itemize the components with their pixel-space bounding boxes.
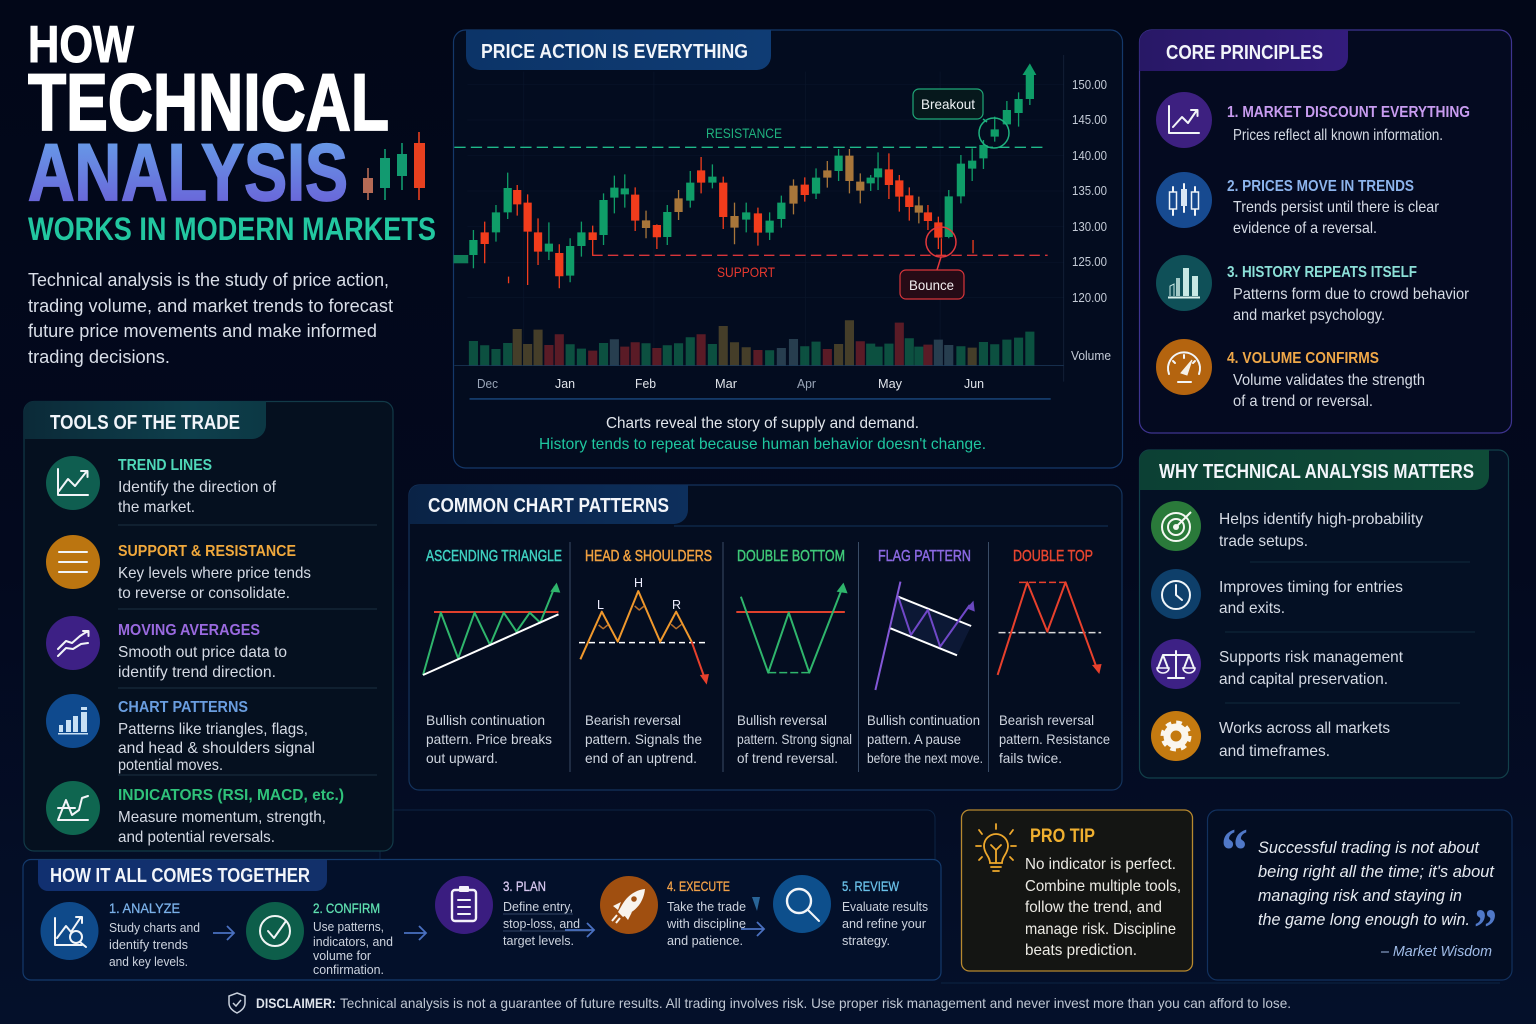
month axis labels: May <box>878 377 903 391</box>
price axis labels: 135.00 <box>1072 184 1107 198</box>
panel: core principles <box>1140 30 1512 433</box>
quote text: being right all the time; it's about <box>1258 862 1495 881</box>
heading tab: price action <box>466 30 771 70</box>
pattern: double top: pattern. Resistance <box>999 731 1110 747</box>
step 2: confirm <box>246 900 393 977</box>
pattern: ascending triangle: ASCENDING TRIANGLE <box>426 548 562 565</box>
step 4: execute: and patience. <box>667 934 743 948</box>
tool: trend lines: the market. <box>118 499 195 516</box>
month axis labels: Apr <box>797 377 816 391</box>
reason: timing: and exits. <box>1219 600 1285 617</box>
arrow 2 <box>404 926 426 940</box>
step 2: confirm: 2. CONFIRM <box>313 900 380 916</box>
tool: chart patterns: and head & shoulders signal <box>118 740 315 757</box>
month axis labels: Jan <box>555 377 575 391</box>
pattern: head and shoulders: end of an uptrend. <box>585 750 697 766</box>
candlestick chart <box>453 55 1064 399</box>
step 3: plan: target levels. <box>503 934 574 948</box>
panel: tools of the trade <box>24 401 393 851</box>
opening quote mark: “ <box>1221 817 1248 885</box>
pattern: head and shoulders: R <box>672 598 681 612</box>
quote text <box>1258 838 1495 929</box>
pattern: double bottom <box>736 548 852 766</box>
reason: risk: and capital preservation. <box>1219 671 1388 688</box>
tool: trend lines: TREND LINES <box>118 457 212 474</box>
panel: price action chart <box>453 30 1122 468</box>
label: support: SUPPORT <box>717 264 775 280</box>
reason: markets: Works across all markets <box>1219 720 1390 737</box>
pattern: ascending triangle: out upward. <box>426 750 498 766</box>
pattern: double bottom: DOUBLE BOTTOM <box>737 548 845 565</box>
label: resistance: RESISTANCE <box>706 125 782 141</box>
pattern: double bottom: of trend reversal. <box>737 750 838 766</box>
closing quote mark: ” <box>1474 898 1497 958</box>
step 5: review: Evaluate results <box>842 900 928 914</box>
quote text: Successful trading is not about <box>1258 838 1480 857</box>
intro paragraph: trading decisions. <box>28 347 170 367</box>
pattern: double top: Bearish reversal <box>999 712 1094 728</box>
quote text: managing risk and staying in <box>1258 886 1462 905</box>
month axis labels: Jun <box>964 377 984 391</box>
step 2: confirm: indicators, and <box>313 935 393 949</box>
intro paragraph: Technical analysis is the study of price action, <box>28 270 389 290</box>
tip text: manage risk. Discipline <box>1025 921 1176 938</box>
heading tab: tools <box>24 401 266 439</box>
step 2: confirm: volume for <box>313 949 371 963</box>
principle 4: Volume validates the strength <box>1233 372 1425 389</box>
tool: chart patterns: Patterns like triangles, flags, <box>118 721 308 738</box>
step 3: plan: Define entry, <box>503 900 573 914</box>
price axis labels: 120.00 <box>1072 291 1107 305</box>
principle 3: and market psychology. <box>1233 307 1385 324</box>
principle 4 <box>1156 339 1425 410</box>
reason: setups: Helps identify high-probability <box>1219 511 1423 528</box>
price axis labels: 145.00 <box>1072 113 1107 127</box>
disclaimer: DISCLAIMER: <box>256 995 336 1011</box>
volume bars <box>473 320 1030 366</box>
month axis labels <box>477 377 984 391</box>
intro paragraph <box>28 270 393 367</box>
step 1: analyze: identify trends <box>109 938 188 952</box>
price axis labels <box>1071 78 1111 363</box>
tip text: Combine multiple tools, <box>1025 878 1181 895</box>
heading tab: patterns <box>409 485 688 524</box>
pattern: double top: DOUBLE TOP <box>1013 548 1093 565</box>
step 2: confirm: Use patterns, <box>313 920 384 934</box>
step 5: review: 5. REVIEW <box>842 878 900 894</box>
tip text: follow the trend, and <box>1025 899 1162 916</box>
principle 3 <box>1156 255 1470 324</box>
pattern: head and shoulders: H <box>634 576 643 590</box>
arrow 4 <box>741 922 764 936</box>
tool: indicators: and potential reversals. <box>118 829 275 846</box>
pattern: ascending triangle: Bullish continuation <box>426 712 545 728</box>
heading tab: core principles <box>1140 30 1348 71</box>
heading tab: patterns: COMMON CHART PATTERNS <box>428 495 669 517</box>
principle 4: 4. VOLUME CONFIRMS <box>1227 350 1379 367</box>
step 4: execute: 4. EXECUTE <box>667 878 730 894</box>
panel: quote <box>1208 810 1512 980</box>
tool: support and resistance: SUPPORT & RESISTANCE <box>118 543 296 560</box>
price axis labels: Volume <box>1071 349 1111 363</box>
attribution: – Market Wisdom <box>1380 943 1492 960</box>
price axis labels: 140.00 <box>1072 149 1107 163</box>
step 1: analyze: 1. ANALYZE <box>109 900 180 916</box>
step 3: plan <box>435 876 580 948</box>
title block <box>28 16 436 247</box>
heading tab: why matters: WHY TECHNICAL ANALYSIS MATTERS <box>1159 461 1474 483</box>
tool: indicators <box>46 781 344 846</box>
tool: support and resistance <box>46 535 311 602</box>
reason: markets: and timeframes. <box>1219 743 1330 760</box>
step 3: plan: stop-loss, and <box>503 917 580 931</box>
principle 1 <box>1156 92 1470 148</box>
pattern: flag: pattern. A pause <box>867 731 961 747</box>
icon: shield <box>229 993 245 1013</box>
tool: moving averages: Smooth out price data to <box>118 644 287 661</box>
heading tab: why matters <box>1140 450 1489 490</box>
price axis labels: 125.00 <box>1072 255 1107 269</box>
step 2: confirm: confirmation. <box>313 963 384 977</box>
heading tab: how it comes together <box>38 860 327 891</box>
tool: moving averages <box>46 616 287 681</box>
step 1: analyze: and key levels. <box>109 955 188 969</box>
step 5: review <box>773 875 928 948</box>
subtitle: WORKS IN MODERN MARKETS <box>28 211 436 247</box>
tool: indicators: Measure momentum, strength, <box>118 809 326 826</box>
reason: setups <box>1151 501 1423 551</box>
pattern: double bottom: pattern. Strong signal <box>737 731 852 747</box>
pattern: ascending triangle: pattern. Price breaks <box>426 731 552 747</box>
pattern: head and shoulders: HEAD & SHOULDERS <box>585 548 712 565</box>
step 5: review: strategy. <box>842 934 890 948</box>
pattern: head and shoulders <box>579 548 712 766</box>
reason: risk: Supports risk management <box>1219 649 1404 666</box>
arrow 1 <box>213 926 234 940</box>
tool: chart patterns: CHART PATTERNS <box>118 699 248 716</box>
principle 3: Patterns form due to crowd behavior <box>1233 286 1470 303</box>
reason: timing <box>1151 569 1403 619</box>
pattern: double top: fails twice. <box>999 750 1062 766</box>
heading tab: how it comes together: HOW IT ALL COMES TOGETHER <box>50 865 310 887</box>
step 1: analyze: Study charts and <box>109 921 200 935</box>
principle 4: of a trend or reversal. <box>1233 393 1373 410</box>
chart caption: Charts reveal the story of supply and demand. <box>606 415 919 432</box>
callout: breakout <box>913 89 1009 148</box>
tan candles <box>646 149 919 244</box>
principle 1: 1. MARKET DISCOUNT EVERYTHING <box>1227 104 1470 121</box>
support line <box>592 253 1048 257</box>
green candles <box>473 63 1036 282</box>
reason: timing: Improves timing for entries <box>1219 579 1403 596</box>
title: ANALYSIS: ANALYSIS <box>28 128 348 218</box>
heading tab: core principles: CORE PRINCIPLES <box>1166 42 1323 64</box>
tool: trend lines <box>46 456 277 516</box>
price axis labels: 150.00 <box>1072 78 1107 92</box>
chart caption: History tends to repeat because human behavior doesn't change. <box>539 436 986 453</box>
pattern: flag: before the next move. <box>867 750 983 766</box>
month axis labels: Feb <box>635 377 656 391</box>
title: TECHNICAL: TECHNICAL <box>28 58 389 148</box>
principle 2: evidence of a reversal. <box>1233 220 1377 237</box>
principle 2: Trends persist until there is clear <box>1233 199 1440 216</box>
tool: moving averages: MOVING AVERAGES <box>118 622 260 639</box>
callout: bounce <box>900 227 964 299</box>
title: HOW: HOW <box>28 16 135 74</box>
quote text: the game long enough to win. <box>1258 910 1470 929</box>
reason: markets <box>1151 711 1390 761</box>
tool: moving averages: identify trend direction. <box>118 664 276 681</box>
principle 2: 2. PRICES MOVE IN TRENDS <box>1227 178 1414 195</box>
tool: support and resistance: to reverse or consolidate. <box>118 585 290 602</box>
tool: chart patterns: potential moves. <box>118 757 223 774</box>
pattern: double top <box>998 548 1110 766</box>
step 3: plan: 3. PLAN <box>503 878 546 894</box>
disclaimer: Technical analysis is not a guarantee of future results. All trading involves risk. Use proper risk management and never invest more than you can afford to lose. <box>340 995 1291 1011</box>
icon: light bulb <box>976 824 1016 871</box>
month axis labels: Mar <box>715 377 737 391</box>
reason: setups: trade setups. <box>1219 533 1308 550</box>
heading tab: tools: TOOLS OF THE TRADE <box>50 412 240 434</box>
month axis labels: Dec <box>477 377 498 391</box>
step 1: analyze <box>40 900 200 969</box>
pattern: double bottom: Bullish reversal <box>737 712 827 728</box>
step 5: review: and refine your <box>842 917 926 931</box>
principle 3: 3. HISTORY REPEATS ITSELF <box>1227 264 1417 281</box>
panel: why technical analysis matters <box>1140 450 1508 778</box>
pattern: flag <box>867 548 983 766</box>
tip text: beats prediction. <box>1025 942 1137 959</box>
tool: chart patterns <box>46 694 315 774</box>
panel: common chart patterns <box>409 485 1122 790</box>
tool: support and resistance: Key levels where price tends <box>118 565 311 582</box>
red candles <box>485 153 973 288</box>
intro paragraph: trading volume, and market trends to forecast <box>28 296 393 316</box>
tip text <box>1025 856 1181 959</box>
pattern: head and shoulders: Bearish reversal <box>585 712 681 728</box>
panel: how it all comes together <box>23 860 941 980</box>
principle 1: Prices reflect all known information. <box>1233 127 1443 144</box>
tool: indicators: INDICATORS (RSI, MACD, etc.) <box>118 787 344 804</box>
heading: pro tip: PRO TIP <box>1030 826 1095 847</box>
arrow 3 <box>565 923 594 937</box>
pattern: flag: FLAG PATTERN <box>878 548 971 565</box>
step 4: execute: Take the trade <box>667 900 746 914</box>
chart caption <box>539 415 986 453</box>
price axis labels: 130.00 <box>1072 220 1107 234</box>
callout: breakout: Breakout <box>921 96 975 112</box>
panel: pro tip <box>962 810 1192 971</box>
tip text: No indicator is perfect. <box>1025 856 1176 873</box>
intro paragraph: future price movements and make informed <box>28 321 377 341</box>
pattern: flag: Bullish continuation <box>867 712 980 728</box>
pattern: head and shoulders: pattern. Signals the <box>585 731 702 747</box>
heading tab: price action: PRICE ACTION IS EVERYTHING <box>481 41 748 63</box>
step 4: execute <box>600 876 746 948</box>
pattern: ascending triangle <box>423 548 562 766</box>
callout: bounce: Bounce <box>909 277 954 293</box>
resistance line <box>454 145 1048 149</box>
pattern: head and shoulders: L <box>597 598 604 612</box>
step 4: execute: with discipline <box>666 917 746 931</box>
tool: trend lines: Identify the direction of <box>118 479 277 496</box>
reason: risk <box>1151 639 1404 689</box>
icon: mini candlesticks <box>363 132 425 200</box>
principle 2 <box>1156 172 1440 237</box>
